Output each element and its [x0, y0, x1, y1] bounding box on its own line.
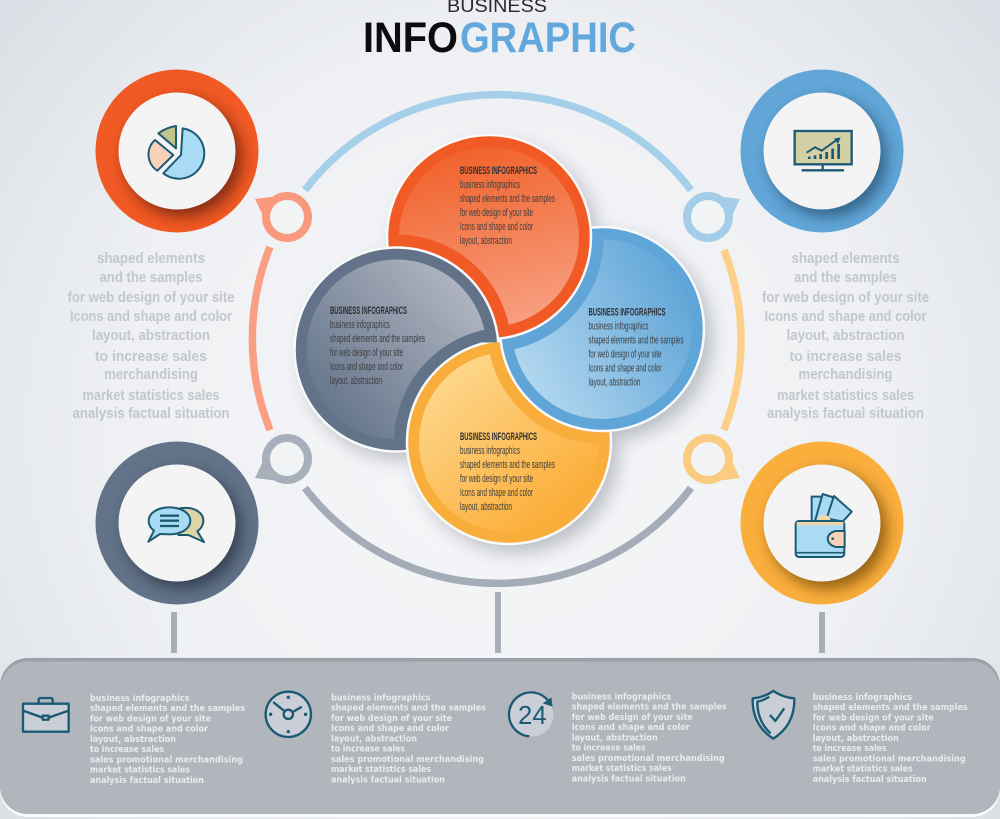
text: column 4: to increase sales: [813, 744, 887, 754]
side text: left: for web design of your site: [68, 289, 234, 306]
text: column 1: Icons and shape and color: [90, 725, 209, 735]
text: column 4: shaped elements and the samples: [813, 703, 968, 713]
petal: orange: [387, 135, 591, 339]
icon: wallet with banknotes: [796, 494, 852, 557]
icon: chat bubbles: [148, 507, 204, 542]
petal: gray: [294, 248, 498, 452]
text: column 1: [90, 694, 245, 786]
text: gray petal: layout, abstraction: [330, 375, 382, 387]
text: column 3: analysis factual situation: [572, 774, 686, 784]
text: column 4: for web design of your site: [813, 714, 934, 724]
text: yellow petal: layout, abstraction: [460, 501, 512, 513]
text: yellow petal: business infographics: [460, 445, 520, 457]
text: orange petal: Icons and shape and color: [460, 221, 533, 233]
ring marker: blue: [687, 196, 740, 238]
side text: left: market statistics sales: [82, 387, 220, 404]
text: column 3: [572, 692, 727, 784]
icon: briefcase: [23, 698, 69, 732]
icon: pie chart: [149, 126, 204, 179]
text: blue petal: business infographics: [588, 320, 649, 332]
text: column 2: Icons and shape and color: [331, 724, 450, 734]
text: column 4: layout, abstraction: [813, 734, 899, 744]
text: blue petal: [588, 306, 684, 388]
side text: left: Icons and shape and color: [70, 308, 232, 325]
text: column 3: sales promotional merchandising: [572, 754, 725, 764]
side text: left: layout, abstraction: [92, 327, 210, 344]
text: column 1: shaped elements and the samples: [90, 704, 245, 714]
side text: right: layout, abstraction: [786, 327, 904, 344]
icon: clock: [266, 692, 311, 737]
text: column 2: business infographics: [331, 693, 430, 703]
text: yellow petal: shaped elements and the samples: [460, 459, 555, 471]
text: column 2: to increase sales: [331, 744, 405, 754]
side text: left: shaped elements: [97, 250, 205, 267]
side text: right: [762, 250, 929, 422]
side text: right: and the samples: [794, 269, 897, 286]
text: column 1: business infographics: [90, 694, 190, 704]
text: yellow petal: Icons and shape and color: [460, 487, 533, 499]
corner badge: monitor chart: [740, 70, 904, 232]
side text: right: for web design of your site: [762, 289, 929, 306]
text: column 1: market statistics sales: [90, 766, 190, 776]
text: column 1: sales promotional merchandising: [90, 756, 243, 766]
side text: right: Icons and shape and color: [764, 308, 927, 325]
text: column 2: sales promotional merchandising: [331, 755, 484, 765]
text: gray petal: [330, 305, 425, 387]
side text: left: [68, 250, 234, 422]
text: blue petal: BUSINESS INFOGRAPHICS: [588, 306, 666, 318]
text: gray petal: business infographics: [330, 319, 390, 331]
text: gray petal: shaped elements and the samples: [330, 333, 425, 345]
text: yellow petal: for web design of your site: [460, 473, 533, 485]
corner badge: wallet: [740, 442, 904, 604]
text: orange petal: for web design of your site: [460, 207, 533, 219]
text: gray petal: Icons and shape and color: [330, 361, 403, 373]
text: orange petal: business infographics: [460, 179, 520, 191]
text: column 2: shaped elements and the samples: [331, 704, 486, 714]
text: column 4: analysis factual situation: [813, 775, 927, 785]
side text: left: analysis factual situation: [72, 405, 230, 422]
text: column 2: [331, 693, 486, 785]
text: column 3: market statistics sales: [572, 764, 672, 774]
pinwheel circles: [294, 135, 712, 553]
text: column 4: market statistics sales: [813, 765, 913, 775]
text: column 2: analysis factual situation: [331, 775, 445, 785]
text: blue petal: Icons and shape and color: [588, 362, 662, 374]
text: orange petal: layout, abstraction: [460, 235, 512, 247]
text: column 1: to increase sales: [90, 745, 164, 755]
text: column 2: market statistics sales: [331, 765, 431, 775]
side text: right: merchandising: [798, 366, 892, 383]
title: [363, 0, 636, 62]
text: gray petal: BUSINESS INFOGRAPHICS: [330, 305, 407, 317]
text: blue petal: for web design of your site: [588, 348, 662, 360]
text: gray petal: for web design of your site: [330, 347, 403, 359]
text: orange petal: shaped elements and the samples: [460, 193, 555, 205]
text: column 3: layout, abstraction: [572, 733, 658, 743]
icon: 24 hours: [509, 692, 553, 737]
icon: monitor with rising chart: [795, 131, 852, 170]
side text: left: and the samples: [100, 269, 202, 286]
text: blue petal: layout, abstraction: [588, 376, 640, 388]
icon: shield with check: [753, 691, 794, 739]
text: column 3: business infographics: [572, 692, 671, 702]
petal: gray overlap on orange: [384, 246, 500, 342]
petal: yellow: [407, 340, 611, 544]
bottom panel: [0, 658, 1000, 817]
side text: right: shaped elements: [792, 250, 900, 267]
text: orange petal: BUSINESS INFOGRAPHICS: [460, 165, 537, 177]
ring marker: gray: [255, 438, 308, 481]
text: column 4: sales promotional merchandising: [813, 754, 966, 764]
title: INFO: [363, 14, 458, 62]
text: column 2: for web design of your site: [331, 714, 452, 724]
title: GRAPHIC: [460, 14, 636, 62]
ring marker: orange: [255, 196, 308, 238]
side text: left: to increase sales: [95, 348, 207, 365]
corner badge: pie chart: [96, 70, 258, 232]
side text: right: market statistics sales: [777, 387, 914, 404]
text: column 3: Icons and shape and color: [572, 723, 690, 733]
side text: right: analysis factual situation: [767, 405, 924, 422]
text: column 4: Icons and shape and color: [813, 724, 931, 734]
ring marker: yellow: [687, 438, 740, 481]
side text: left: merchandising: [104, 366, 198, 383]
text: column 4: [813, 693, 968, 785]
text: column 2: layout, abstraction: [331, 734, 417, 744]
text: yellow petal: BUSINESS INFOGRAPHICS: [460, 431, 537, 443]
text: column 1: analysis factual situation: [90, 776, 204, 786]
text: column 1: layout, abstraction: [90, 735, 176, 745]
corner badge: chat bubbles: [96, 442, 258, 604]
connector bars: [171, 592, 825, 653]
text: column 3: for web design of your site: [572, 713, 693, 723]
side text: right: to increase sales: [790, 348, 902, 365]
text: column 4: business infographics: [813, 693, 912, 703]
text: column 1: for web design of your site: [90, 714, 211, 724]
outer ring arcs: [252, 95, 741, 583]
petal shadows: [302, 144, 712, 553]
text: column 3: shaped elements and the samples: [572, 702, 727, 712]
text: column 3: to increase sales: [572, 744, 646, 754]
petal: blue: [500, 227, 704, 431]
text: orange petal: [460, 165, 555, 247]
text: yellow petal: [460, 431, 555, 513]
text: blue petal: shaped elements and the samples: [588, 334, 684, 346]
icon: 24 hours: 24: [518, 700, 547, 730]
